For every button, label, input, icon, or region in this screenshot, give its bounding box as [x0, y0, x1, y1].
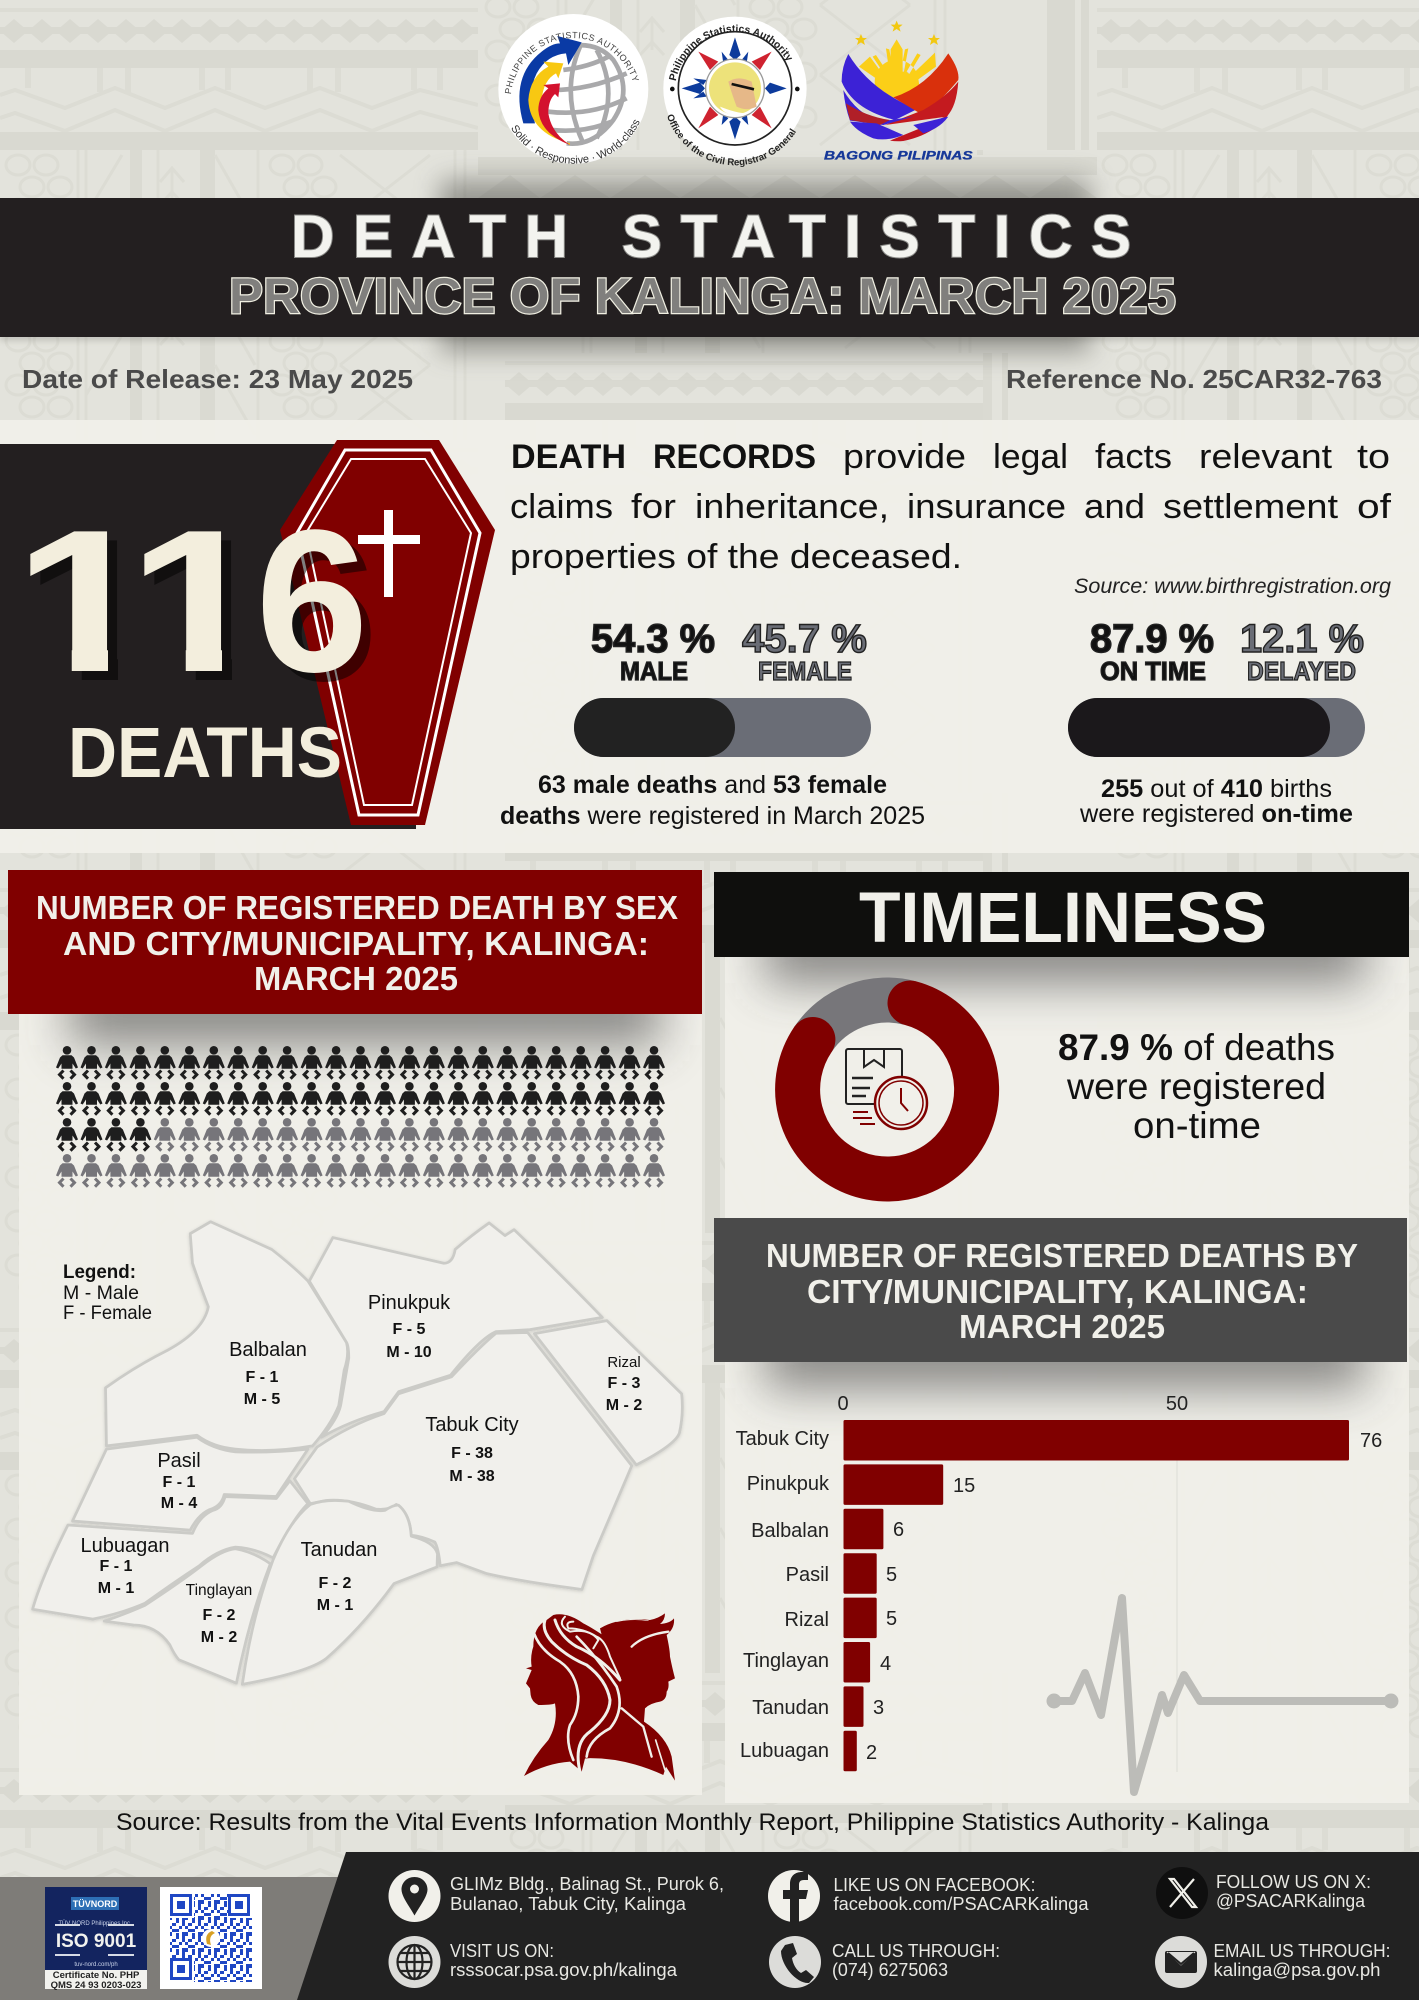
contact: email — [1155, 1936, 1390, 1988]
intro text: death records: properties of the deceased. — [510, 538, 962, 576]
map labels: Pinukpuk — [368, 1292, 451, 1314]
contact: Facebook: facebook.com/PSACARKalinga — [834, 1894, 1089, 1914]
icon: male and female silhouette — [524, 1613, 675, 1781]
badge: ISO 9001: QMS 24 93 0203-023 — [51, 1980, 141, 1991]
contact: Facebook: LIKE US ON FACEBOOK: — [834, 1875, 1036, 1895]
heading: registered deaths by municipality: NUMBER OF REGISTERED DEATHS BY — [766, 1237, 1358, 1274]
map labels: F - 1 — [163, 1474, 196, 1491]
logo: Office of the Civil Registrar General seal — [663, 16, 806, 167]
contact: address — [388, 1870, 724, 1922]
bar values: 6 — [893, 1519, 904, 1541]
icon: document and clock — [846, 1049, 927, 1129]
map labels: Tabuk City — [425, 1414, 519, 1436]
bar values: 4 — [880, 1653, 891, 1675]
bar values: 5 — [886, 1564, 897, 1586]
map labels: M - 2 — [201, 1629, 237, 1646]
map labels: M - 1 — [317, 1597, 353, 1614]
region: Lubuagan — [33, 1481, 308, 1619]
intro text: death records: claims — [510, 488, 613, 526]
bar values: 5 — [886, 1608, 897, 1630]
heading: registered death by sex: MARCH 2025 — [254, 960, 458, 997]
source line: Source: Results from the Vital Events Information Monthly Report, Philippine Statistics Authority - Kalinga — [116, 1809, 1270, 1836]
contact: email: kalinga@psa.gov.ph — [1214, 1960, 1380, 1980]
heading: timeliness: TIMELINESS — [859, 879, 1267, 958]
bar category labels: Balbalan — [751, 1520, 829, 1542]
number: 116: 6 — [265, 497, 378, 724]
contact: website: VISIT US ON: — [450, 1941, 554, 1961]
stat: on-time and delayed share: 12.1 % — [1240, 617, 1364, 661]
stat: male and female share: 45.7 % — [742, 617, 867, 661]
contact: phone: CALL US THROUGH: — [832, 1941, 1000, 1961]
bar category labels: Tabuk City — [736, 1428, 829, 1450]
heading: registered death by sex: NUMBER OF REGISTERED DEATH BY SEX — [36, 889, 678, 926]
logo: PSA seal: PHILIPPINE STATISTICS AUTHORITY — [504, 32, 639, 94]
date of release: Date of Release: 23 May 2025 — [22, 364, 413, 394]
title: Death Statistics: DEATH STATISTICS — [291, 203, 1131, 270]
map labels: F - 2 — [319, 1575, 352, 1592]
logo: PSA seal: Solid · Responsive · World-class — [512, 120, 640, 164]
badge: ISO 9001: TÜVNORD — [73, 1899, 118, 1909]
bar values: 15 — [953, 1475, 975, 1497]
badge: ISO 9001: ISO 9001 — [56, 1931, 137, 1952]
map labels: F - 38 — [451, 1445, 493, 1462]
map labels: Rizal — [607, 1354, 641, 1371]
bar category labels: Tinglayan — [743, 1650, 829, 1672]
chart: on-time donut — [798, 1000, 977, 1179]
contact: Facebook — [768, 1870, 1089, 1922]
axis labels: 0 — [837, 1393, 849, 1415]
map labels — [81, 1292, 642, 1646]
map: Kalinga municipalities — [33, 1222, 682, 1684]
logos row — [498, 14, 974, 167]
text: on-time share: on-time — [1133, 1105, 1261, 1146]
legend: Legend: — [63, 1262, 136, 1283]
logo: Office of the Civil Registrar General seal: Philippine Statistics Authority — [668, 24, 792, 81]
stat: male and female share: FEMALE — [758, 656, 852, 686]
bar category labels: Pasil — [786, 1564, 829, 1586]
footer — [0, 1852, 1419, 2000]
stat: on-time and delayed share — [1068, 617, 1365, 828]
stat: male and female share: MALE — [620, 656, 688, 686]
intro text: death records: inheritance, — [695, 488, 889, 526]
contact: phone — [769, 1936, 1000, 1988]
stat: on-time and delayed share: DELAYED — [1247, 656, 1356, 686]
contact: phone: (074) 6275063 — [832, 1960, 948, 1980]
logo: Bagong Pilipinas: BAGONG PILIPINAS — [824, 148, 974, 162]
title banner — [0, 198, 1419, 337]
map labels: M - 38 — [449, 1468, 495, 1485]
intro text: death records: settlement — [1163, 488, 1339, 526]
bar: male vs female — [574, 698, 871, 757]
stat: on-time and delayed share: ON TIME — [1100, 656, 1206, 686]
heading: registered deaths by municipality: MARCH 2025 — [959, 1308, 1165, 1345]
intro text: death records: provide — [843, 438, 966, 476]
region: Tanudan — [242, 1500, 438, 1684]
intro text: death records: for — [631, 488, 676, 526]
intro text: death records: DEATH — [511, 438, 626, 476]
contact: X: FOLLOW US ON X: — [1216, 1872, 1371, 1892]
text: on-time share: were registered — [1066, 1066, 1326, 1107]
intro text: death records: legal — [993, 438, 1068, 476]
legend: F - Female — [63, 1303, 152, 1324]
contact: website — [388, 1936, 678, 1988]
heading: registered death by sex: AND CITY/MUNICIPALITY, KALINGA: — [63, 925, 649, 962]
number: 116 — [30, 529, 370, 682]
legend: M - Male — [63, 1283, 139, 1304]
stat: male and female share: 54.3 % — [591, 617, 715, 661]
legend — [63, 1262, 152, 1324]
stat: on-time and delayed share: 255 out of 410 births — [1101, 775, 1332, 803]
region: Tabuk City — [294, 1332, 632, 1589]
contact: X: @PSACARKalinga — [1216, 1891, 1366, 1911]
bar values — [866, 1430, 1382, 1764]
contact: address: Bulanao, Tabuk City, Kalinga — [450, 1894, 687, 1914]
axis labels — [837, 1393, 1188, 1415]
intro text: death records: RECORDS — [653, 438, 816, 476]
bar values: 3 — [873, 1697, 884, 1719]
bars — [844, 1420, 1349, 1771]
region: Balbalan — [106, 1222, 348, 1451]
heading: registered death by sex — [8, 870, 702, 1014]
map labels: F - 2 — [203, 1607, 236, 1624]
region: Pinukpuk — [309, 1223, 602, 1437]
stat: male and female share: deaths were registered in March 2025 — [500, 802, 925, 830]
number: 116: 6 — [256, 488, 368, 715]
map labels: M - 1 — [98, 1580, 134, 1597]
chart: deaths by municipality — [736, 1393, 1382, 1772]
logo: Office of the Civil Registrar General seal: Office of the Civil Registrar General — [668, 114, 796, 167]
text: on-time share — [1058, 1027, 1335, 1146]
bar values: 2 — [866, 1742, 877, 1764]
stat: male and female share: 63 male deaths and 53 female — [538, 771, 887, 799]
map labels: M - 10 — [386, 1344, 432, 1361]
region: Rizal — [534, 1321, 682, 1465]
intro text: death records: relevant — [1199, 438, 1333, 476]
badge: ISO 9001: Certificate No. PHP — [53, 1970, 140, 1981]
map labels: F - 1 — [100, 1558, 133, 1575]
map labels: F - 1 — [246, 1369, 279, 1386]
number: 116: 1 — [13, 487, 154, 714]
logo: Bagong Pilipinas — [824, 21, 974, 162]
icon: heartbeat line — [1046, 1598, 1398, 1792]
number: 116: 1 — [127, 487, 268, 714]
text: on-time share: 87.9 % of deaths — [1058, 1027, 1335, 1068]
heading: timeliness — [714, 872, 1409, 958]
stat: male and female share — [500, 617, 925, 830]
bar category labels: Pinukpuk — [747, 1473, 830, 1495]
bar: on-time vs delayed — [1068, 698, 1365, 757]
bar category labels: Lubuagan — [740, 1740, 829, 1762]
intro text: death records — [510, 438, 1392, 576]
map labels: Balbalan — [229, 1339, 307, 1361]
contact: email: EMAIL US THROUGH: — [1214, 1941, 1390, 1961]
panel: sex and municipality — [8, 870, 702, 1795]
intro text: death records: of — [1357, 488, 1392, 526]
label: deaths: DEATHS — [68, 714, 342, 793]
panel: summary — [0, 420, 1419, 853]
badge: ISO 9001: tuv-nord.com/ph — [74, 1962, 118, 1968]
pictogram: male and female people — [56, 1046, 665, 1187]
map labels: M - 4 — [161, 1495, 197, 1512]
bar category labels — [736, 1428, 830, 1762]
source note: Source: www.birthregistration.org — [1074, 575, 1391, 598]
subtitle: Province of Kalinga: PROVINCE OF KALINGA: MARCH 2025 — [229, 268, 1176, 324]
map labels: Tanudan — [301, 1539, 377, 1561]
contact: website: rsssocar.psa.gov.ph/kalinga — [450, 1960, 678, 1980]
intro text: death records: facts — [1095, 438, 1172, 476]
map labels: M - 5 — [244, 1391, 280, 1408]
map labels: M - 2 — [606, 1397, 642, 1414]
bar category labels: Rizal — [785, 1609, 829, 1631]
map labels: Lubuagan — [81, 1535, 169, 1557]
axis labels: 50 — [1166, 1393, 1188, 1415]
bar values: 76 — [1360, 1430, 1382, 1452]
stat: on-time and delayed share: 87.9 % — [1090, 617, 1214, 661]
intro text: death records: and — [1084, 488, 1145, 526]
total deaths block — [0, 440, 495, 829]
number: 116: 1 — [137, 496, 278, 723]
heading: registered deaths by municipality — [714, 1218, 1407, 1362]
map labels: Tinglayan — [186, 1582, 252, 1599]
heading: registered deaths by municipality: CITY/MUNICIPALITY, KALINGA: — [807, 1273, 1308, 1310]
logo: PSA seal — [498, 14, 648, 164]
map labels: Pasil — [157, 1450, 201, 1472]
number: 116: 1 — [23, 496, 164, 723]
badge: ISO 9001 — [45, 1887, 147, 1991]
reference number: Reference No. 25CAR32-763 — [1006, 364, 1382, 394]
region: Tinglayan — [104, 1549, 270, 1683]
panel: timeliness — [714, 872, 1409, 1803]
bar category labels: Tanudan — [752, 1697, 829, 1719]
map labels: F - 5 — [393, 1321, 426, 1338]
QR code — [160, 1887, 262, 1989]
region: Pasil — [72, 1437, 308, 1530]
map labels: F - 3 — [608, 1375, 641, 1392]
banner shadow — [0, 180, 1419, 352]
stat: on-time and delayed share: were registered on-time — [1079, 800, 1353, 828]
intro text: death records: insurance — [907, 488, 1066, 526]
contact: address: GLIMz Bldg., Balinag St., Purok 6, — [450, 1874, 724, 1894]
icon: coffin — [280, 440, 495, 825]
badge: ISO 9001: TÜV NORD Philippines Inc. — [58, 1920, 132, 1927]
intro text: death records: to — [1357, 438, 1390, 476]
contact: X — [1156, 1867, 1371, 1919]
